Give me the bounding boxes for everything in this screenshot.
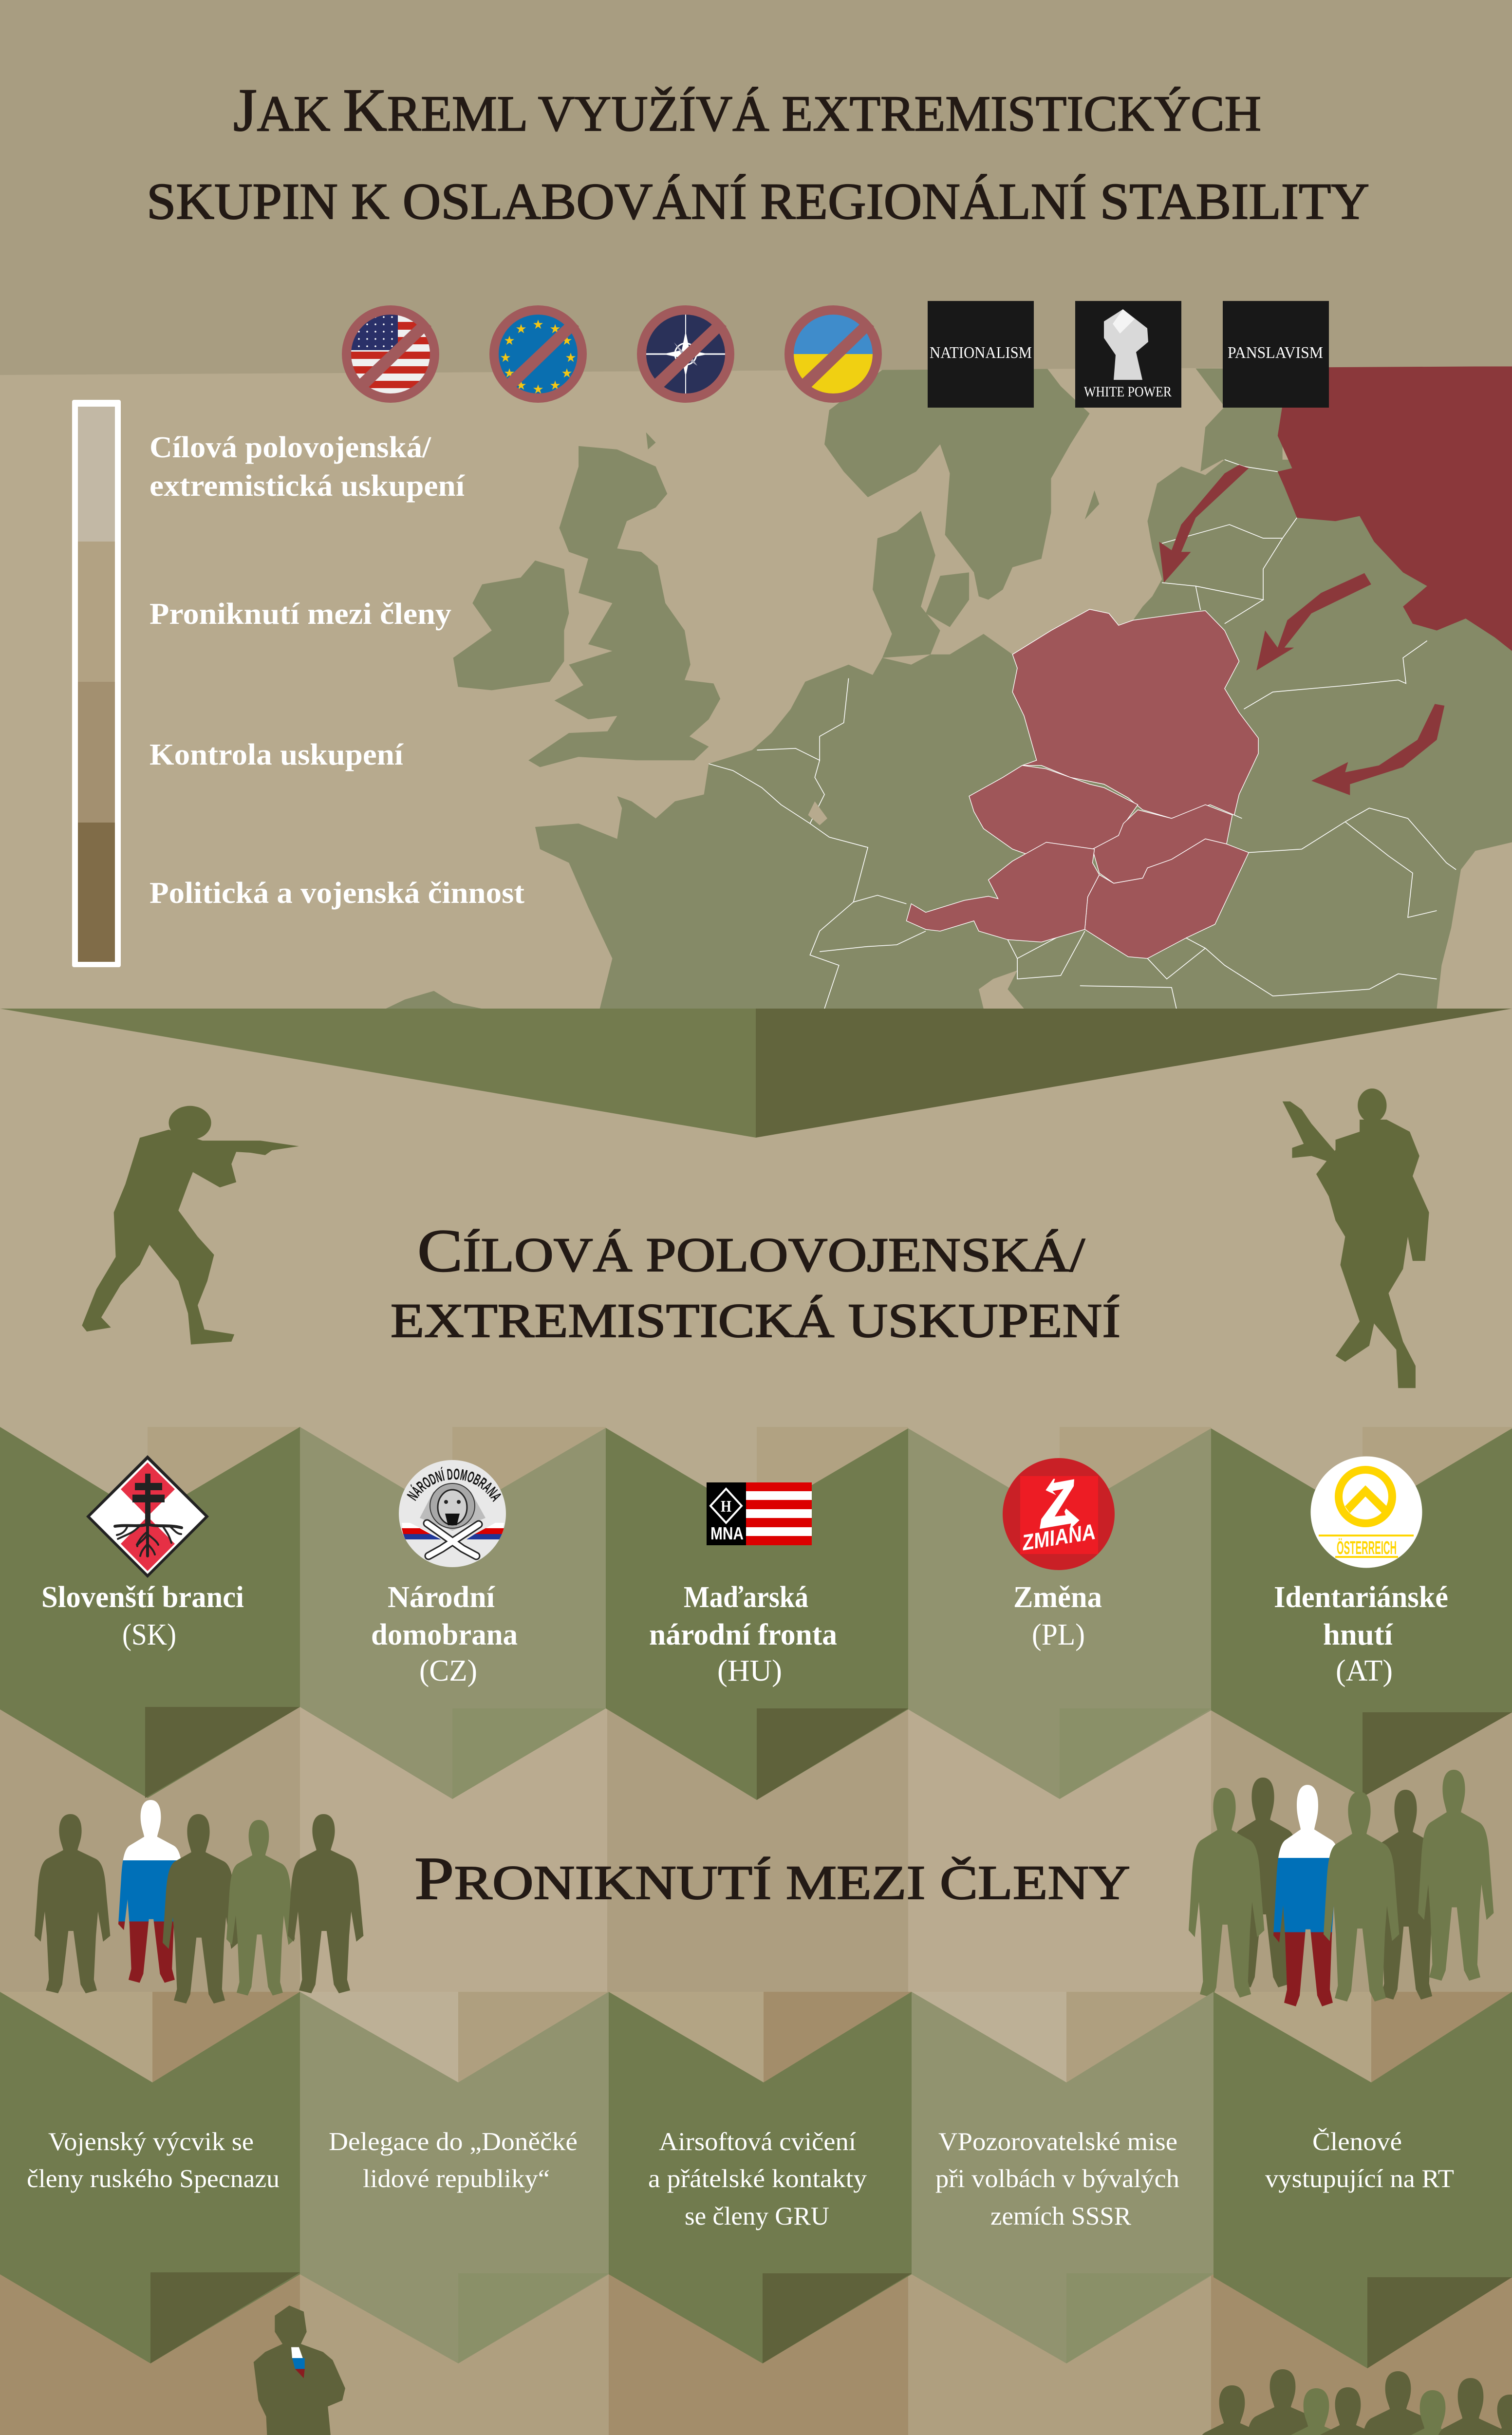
icon: EU crossed: ★ xyxy=(515,322,527,337)
panel: section 3 top band xyxy=(0,1992,1512,2084)
icon row xyxy=(342,301,1329,408)
legend xyxy=(72,400,524,967)
continent xyxy=(535,460,1512,1009)
icon: EU crossed: ★ xyxy=(561,334,573,348)
name: Maďarská národní fronta xyxy=(649,1581,837,1687)
name: Identariánské hnutí: hnutí xyxy=(1323,1618,1393,1651)
text: column 4: zemích SSSR xyxy=(990,2202,1132,2230)
column 1 xyxy=(0,1427,300,1798)
icon: Panslavism: PANSLAVISM xyxy=(1228,344,1323,362)
name: Identariánské hnutí: Identariánské xyxy=(1274,1581,1448,1614)
icon: soldier aiming xyxy=(82,1106,299,1345)
Austria xyxy=(906,843,1099,942)
legend color bar xyxy=(72,400,121,967)
column 4 xyxy=(908,1428,1211,1799)
Scandinavia xyxy=(824,369,1090,599)
panel: section 3 background xyxy=(0,1704,1512,1997)
icon: NATO crossed xyxy=(637,305,734,403)
icon: EU crossed: ★ xyxy=(515,378,527,393)
heading: target groups: EXTREMISTICKÁ USKUPENÍ xyxy=(391,1293,1120,1348)
name: Identariánské hnutí: (AT) xyxy=(1336,1654,1393,1687)
logo: Maďarská národní fronta xyxy=(707,1482,812,1545)
name: Maďarská národní fronta: (HU) xyxy=(717,1654,782,1687)
top shading triangles xyxy=(148,1427,1512,1519)
icon: EU crossed: ★ xyxy=(549,322,561,337)
Ireland xyxy=(453,561,569,690)
icon: men with flag figure, right xyxy=(1189,1770,1493,2006)
Russia xyxy=(1278,366,1512,651)
Finland xyxy=(1195,369,1283,471)
heading: target groups xyxy=(391,1218,1120,1348)
panel: group columns xyxy=(0,1427,1512,1800)
name: Národní domobrana xyxy=(371,1581,518,1687)
logo: Změna: ZMIANA xyxy=(1020,1519,1097,1555)
name: Maďarská národní fronta: národní fronta xyxy=(649,1618,837,1651)
icon: EU crossed: ★ xyxy=(504,334,515,348)
title xyxy=(147,77,1369,230)
arrow: Baltic xyxy=(1159,465,1249,582)
logo: Maďarská národní fronta: MNA xyxy=(710,1523,744,1543)
name: Změna: (PL) xyxy=(1032,1618,1085,1651)
text: column 5 xyxy=(1265,2128,1454,2193)
column 5 xyxy=(1211,1428,1512,1797)
text: column 3: Airsoftová cvičení xyxy=(659,2128,856,2156)
Danish islands xyxy=(926,572,969,627)
logo arc text: NÁRODNÍ DOMOBRANA xyxy=(407,1467,501,1502)
legend labels: Politická a vojenská činnost xyxy=(149,877,524,910)
name: Identariánské hnutí xyxy=(1274,1581,1448,1687)
text: column 5: vystupující na RT xyxy=(1265,2165,1454,2193)
icon: soldiers with flag figure, left xyxy=(35,1800,363,2004)
name: Změna xyxy=(1013,1581,1102,1651)
Denmark xyxy=(873,511,940,658)
legend labels: Cílová polovojenská/ xyxy=(149,431,431,464)
name: Maďarská národní fronta: Maďarská xyxy=(684,1581,808,1614)
group names xyxy=(41,1581,1448,1687)
chevron divider xyxy=(0,1009,1512,1138)
legend labels: extremistická uskupení xyxy=(149,469,465,503)
icon: EU crossed: ★ xyxy=(504,366,515,381)
legend labels: Kontrola uskupení xyxy=(149,738,404,771)
arrow: Belarus xyxy=(1256,573,1371,671)
icon: Nationalism: NATIONALISM xyxy=(930,344,1032,362)
column 3 xyxy=(606,1428,908,1800)
Gotland xyxy=(1085,490,1099,520)
text: column 2: lidové republiky“ xyxy=(363,2165,550,2193)
logo: Identariánské hnutí xyxy=(1311,1456,1422,1568)
logo: Maďarská národní fronta: H xyxy=(721,1498,731,1516)
title line 1: JAK KREML VYUŽÍVÁ EXTREMISTICKÝCH xyxy=(233,77,1261,144)
top band xyxy=(0,0,1512,375)
Slovakia xyxy=(1093,805,1232,883)
text: column 2 xyxy=(329,2128,578,2193)
icon: man in suit with flag tie xyxy=(254,2305,347,2435)
name: Národní domobrana: Národní xyxy=(388,1581,495,1614)
arrow: Ukraine xyxy=(1311,704,1444,795)
name: Slovenští branci xyxy=(41,1581,244,1651)
Britain xyxy=(528,446,720,767)
heading: infiltration: PRONIKNUTÍ MEZI ČLENY xyxy=(414,1845,1130,1912)
icon: EU crossed: ★ xyxy=(561,366,573,381)
logo: Změna xyxy=(1003,1458,1115,1570)
icon: EU crossed: ★ xyxy=(500,351,511,365)
logo: Slovenští branci xyxy=(86,1455,209,1578)
text: column 5: Členové xyxy=(1312,2128,1402,2156)
icon: EU crossed xyxy=(489,305,587,403)
title line 2: SKUPIN K OSLABOVÁNÍ REGIONÁLNÍ STABILITY xyxy=(147,173,1369,230)
Czechia xyxy=(969,766,1138,858)
Scottish isles xyxy=(646,432,656,450)
Hungary xyxy=(1085,839,1249,958)
icon: White power xyxy=(1075,301,1181,408)
heading: target groups: CÍLOVÁ POLOVOJENSKÁ/ xyxy=(417,1218,1085,1285)
icon: Panslavism xyxy=(1223,301,1329,408)
infiltration texts xyxy=(27,2128,1454,2230)
icon: EU crossed: ★ xyxy=(549,378,561,393)
name: Slovenští branci: Slovenští branci xyxy=(41,1581,244,1614)
text: column 4: při volbách v bývalých xyxy=(935,2165,1179,2193)
icon: EU crossed: ★ xyxy=(565,351,577,365)
name: Slovenští branci: (SK) xyxy=(122,1618,176,1651)
icon: Nationalism xyxy=(928,301,1034,408)
text: column 4 xyxy=(935,2128,1179,2230)
map of Europe xyxy=(386,366,1512,1009)
text: column 1: Vojenský výcvik se xyxy=(48,2128,254,2156)
Poland xyxy=(1012,609,1258,818)
name: Národní domobrana: domobrana xyxy=(371,1618,518,1651)
Adriatic Sea xyxy=(979,971,1024,1009)
column 2 xyxy=(300,1427,606,1799)
icon: crowd xyxy=(1191,2369,1512,2435)
name: Změna: Změna xyxy=(1013,1581,1102,1614)
national borders xyxy=(709,460,1456,1009)
text: column 1: členy ruského Specnazu xyxy=(27,2165,280,2193)
text: column 4: VPozorovatelské mise xyxy=(938,2128,1177,2156)
map background xyxy=(0,360,1512,1013)
Luxembourg xyxy=(808,801,827,825)
name: Národní domobrana: (CZ) xyxy=(419,1654,477,1687)
icon: soldier standing with rifle xyxy=(1283,1088,1429,1388)
panel: section 4 background xyxy=(0,2269,1512,2435)
icon: White power: WHITE POWER xyxy=(1084,384,1172,400)
text: column 2: Delegace do „Doněčké xyxy=(329,2128,578,2156)
legend labels xyxy=(149,431,524,910)
text: column 1 xyxy=(27,2128,280,2193)
bottom shading triangles xyxy=(145,1707,1512,1800)
Spanish coast xyxy=(386,991,482,1009)
logo: Národní domobrana xyxy=(399,1460,506,1567)
icon: EU crossed: ★ xyxy=(532,318,544,332)
panel: infiltration columns xyxy=(0,1992,1512,2368)
icon: Ukraine crossed xyxy=(784,305,882,403)
targeted countries xyxy=(906,609,1258,958)
text: column 3 xyxy=(648,2128,867,2230)
logo: Identariánské hnutí: ÖSTERREICH xyxy=(1337,1537,1397,1558)
panel: target groups background xyxy=(0,1009,1512,1715)
icon: USA crossed xyxy=(342,305,439,403)
icon: EU crossed: ★ xyxy=(532,382,544,397)
text: column 3: se členy GRU xyxy=(685,2202,829,2230)
legend labels: Proniknutí mezi členy xyxy=(149,598,451,631)
text: column 3: a přátelské kontakty xyxy=(648,2165,867,2193)
